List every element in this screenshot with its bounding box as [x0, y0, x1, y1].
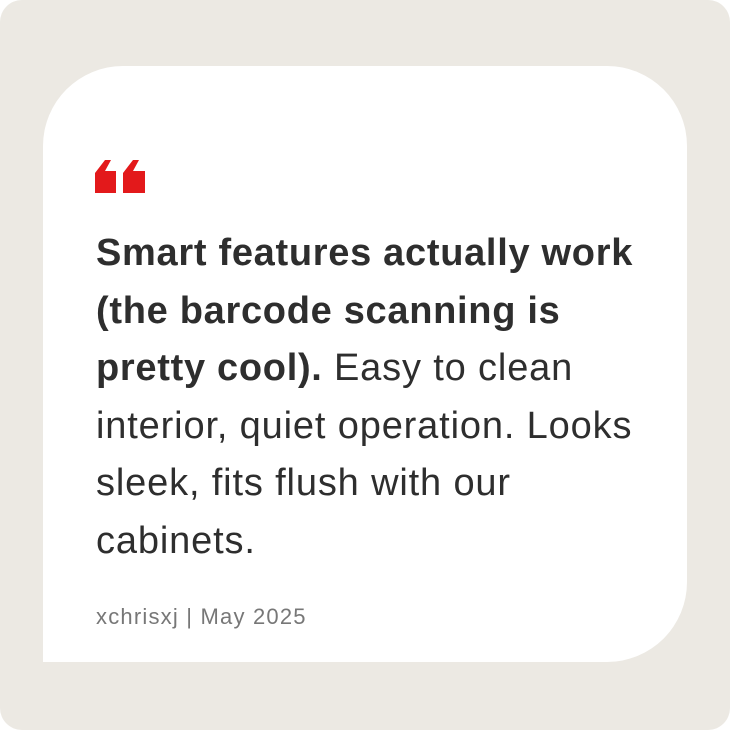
attribution: xchrisxj | May 2025	[96, 604, 307, 629]
quote text: interior, quiet operation. Looks	[96, 404, 632, 446]
quote text: (the barcode scanning is	[96, 290, 560, 332]
quote text: cabinets.	[96, 520, 256, 562]
quote text	[96, 232, 633, 562]
quote text: pretty cool). Easy to clean	[96, 347, 573, 389]
icon: quote mark	[95, 160, 145, 193]
panel: quote card	[43, 66, 687, 662]
quote text: Smart features actually work	[96, 232, 633, 274]
quote text: sleek, fits flush with our	[96, 462, 511, 504]
